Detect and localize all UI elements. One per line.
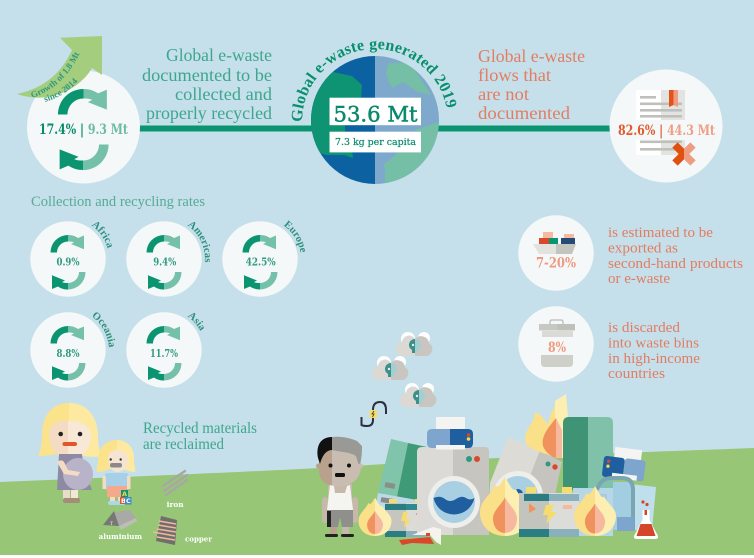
flame middle [480, 477, 530, 536]
documented text block: documented to be [142, 65, 272, 85]
export text block: or e-waste [608, 271, 670, 287]
bottom white strip [0, 555, 754, 558]
recycled materials text: Recycled materials [143, 420, 257, 437]
fridge [563, 417, 613, 536]
export text block [608, 225, 743, 287]
icon: chemical flask [634, 500, 658, 539]
icon: aluminium ingot [103, 510, 137, 530]
document icon [636, 90, 685, 155]
flame right [574, 486, 616, 536]
bin figure: 8% [548, 340, 566, 356]
region: Oceania: 8.8% [56, 347, 80, 360]
icon: aluminium ingot: T [110, 522, 113, 527]
region: Europe: 42.5% [246, 256, 276, 268]
panel: export [518, 215, 594, 291]
region: Asia [126, 312, 204, 388]
flame left [358, 498, 392, 536]
panel: documented recycling circle [17, 36, 140, 184]
label: iron: iron [167, 500, 184, 509]
region: Europe: Europe [284, 220, 305, 252]
woman figure [38, 403, 102, 503]
heading: collection rates: Collection and recycling rates [31, 194, 205, 210]
tilted appliance right [488, 437, 562, 530]
region: Americas: 9.4% [153, 256, 177, 268]
documented text block: Global e-waste [166, 45, 272, 65]
green board [375, 439, 427, 512]
white circle [27, 70, 140, 184]
washing machine [417, 447, 489, 535]
recycling icon [58, 89, 109, 170]
region: Americas [126, 221, 210, 297]
icon: cable with plug [362, 402, 386, 426]
undocumented text block [478, 46, 585, 123]
flame top large [525, 394, 568, 458]
icon: toy blocks: C [126, 497, 131, 505]
tilted printer right [602, 446, 647, 482]
documented text block: collected and [175, 84, 272, 104]
per capita box [330, 132, 421, 152]
documented text block [142, 45, 272, 123]
label: copper: copper [185, 535, 212, 544]
export text block: exported as [608, 240, 678, 256]
undocumented text block: documented [478, 103, 570, 123]
smoke cloud with skull [400, 383, 436, 407]
growth arrow [17, 36, 102, 102]
globe map [311, 56, 439, 184]
icon: toy blocks: B [121, 497, 126, 505]
panel: undocumented circle [610, 70, 722, 182]
icon: toy blocks [120, 490, 132, 505]
region: Oceania [30, 312, 115, 388]
per capita box: 7.3 kg per capita [335, 138, 417, 148]
man figure [316, 437, 363, 537]
bin text block: countries [608, 366, 665, 382]
undocumented text block: flows that [478, 65, 551, 85]
export figure: 7-20% [536, 256, 576, 272]
growth arrow: since 2014 [44, 78, 78, 102]
recycled materials text [143, 420, 257, 453]
smoke cloud with skull [372, 356, 408, 380]
total box: 53.6 Mt [334, 102, 418, 126]
icon: container ship [533, 232, 576, 254]
icon: toy blocks: A [122, 490, 127, 498]
battery right [519, 487, 579, 537]
smoke cloud with skull [396, 332, 432, 356]
recycled materials text: are reclaimed [143, 436, 224, 453]
icon: bin [539, 320, 575, 367]
icon: iron rods [163, 471, 187, 495]
documented text block: properly recycled [146, 103, 272, 123]
label: aluminium: aluminium [99, 532, 143, 541]
region: Oceania: Oceania [93, 312, 115, 348]
documented figure: 17.4% | 9.3 Mt [39, 122, 129, 138]
growth arrow: Growth of 1.8 Mt [31, 52, 80, 97]
grass hill [0, 448, 754, 555]
region: Africa: 0.9% [56, 256, 80, 268]
connecting line [138, 126, 612, 132]
bin text block: in high-income [608, 351, 700, 367]
region: Africa: Africa [92, 222, 112, 248]
panel: globe [292, 40, 456, 184]
region: Asia: 11.7% [150, 347, 178, 360]
export text block: is estimated to be [608, 225, 713, 241]
icon: copper coil [153, 516, 177, 545]
printer on washer [427, 417, 473, 450]
tablet with handle [597, 478, 656, 531]
panel: e-waste pile [358, 394, 658, 545]
bin text block: is discarded [608, 320, 680, 336]
battery left [385, 499, 428, 537]
region: Africa [30, 221, 112, 297]
child figure [97, 440, 135, 505]
region: Asia: Asia [188, 312, 204, 331]
region: Americas: Americas [188, 222, 210, 262]
bin text block [608, 320, 700, 382]
red cross icon [675, 145, 693, 163]
tool on ground [399, 527, 441, 545]
undocumented text block: Global e-waste [478, 46, 585, 66]
curved title: Global e-waste generated 2019 [292, 40, 456, 121]
undocumented figure: 82.6% | 44.3 Mt [618, 123, 716, 139]
bin text block: into waste bins [608, 336, 699, 352]
export text block: second-hand products [608, 256, 743, 272]
panel: waste bin [518, 306, 594, 382]
region: Europe [222, 220, 305, 297]
undocumented text block: are not [478, 84, 529, 104]
